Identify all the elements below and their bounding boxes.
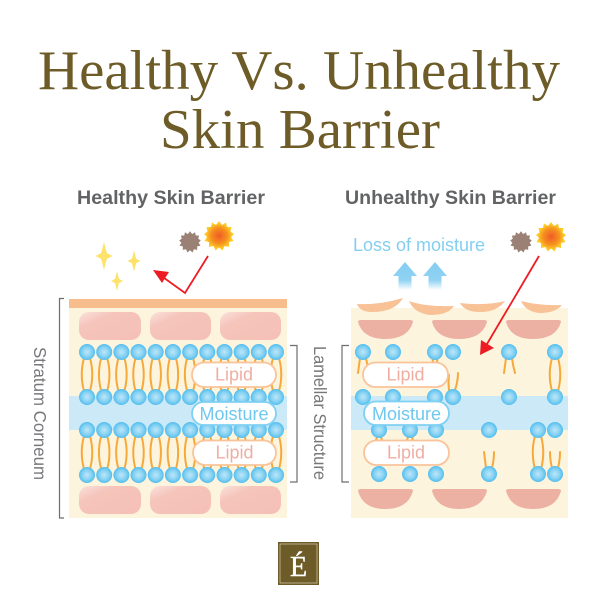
lipid heads	[79, 344, 284, 483]
label: loss of moisture: Loss of moisture	[353, 235, 485, 255]
title: Healthy Vs. Unhealthy	[38, 40, 560, 102]
heading: healthy skin barrier: Healthy Skin Barrier	[77, 187, 265, 209]
stratum corneum bracket	[60, 298, 64, 518]
damaged corneocytes bottom row	[358, 489, 561, 509]
moisture band	[351, 396, 568, 430]
corneocytes top row	[79, 312, 281, 340]
label: moisture: Moisture	[199, 404, 269, 424]
label: lipid	[193, 440, 276, 465]
label: lipid: Lipid	[387, 442, 425, 462]
arrow: deflected rays	[153, 256, 208, 293]
icon: sparkles	[96, 242, 140, 291]
label: lipid: Lipid	[215, 442, 254, 462]
label: moisture	[364, 402, 449, 425]
lipid heads	[355, 344, 563, 482]
label: lipid: Lipid	[215, 364, 253, 384]
label: stratum corneum: Stratum Corneum	[30, 347, 50, 480]
label: moisture: Moisture	[372, 404, 441, 424]
label: lipid: Lipid	[386, 364, 425, 384]
broken lipid tails	[358, 356, 560, 469]
icon: sun	[204, 221, 234, 250]
heading: unhealthy skin barrier: Unhealthy Skin Barrier	[345, 187, 556, 209]
label: lamellar structure: Lamellar Structure	[310, 346, 330, 480]
flaking top skin layer	[357, 298, 562, 315]
arrows: moisture escaping	[393, 262, 447, 290]
top skin layer	[69, 299, 287, 308]
label: lipid	[364, 440, 449, 465]
lipid tails	[82, 358, 281, 469]
title: Skin Barrier	[160, 99, 440, 161]
icon: pollution particle	[179, 231, 201, 252]
logo	[278, 542, 319, 585]
logo: É	[290, 552, 307, 583]
panel: healthy skin barrier	[30, 187, 297, 518]
lamellar bracket	[342, 346, 349, 482]
arrow: rays penetrating	[480, 256, 539, 355]
skin background	[69, 308, 287, 518]
title	[38, 40, 560, 161]
corneocytes bottom row	[79, 486, 281, 514]
skin background	[351, 308, 568, 518]
damaged corneocytes top row	[358, 320, 561, 339]
label: lipid	[192, 362, 276, 387]
icon: pollution particle	[510, 231, 532, 252]
label: lipid	[363, 362, 448, 387]
lamellar bracket	[290, 346, 297, 482]
moisture band	[69, 396, 287, 430]
panel: unhealthy skin barrier	[310, 187, 568, 518]
icon: sun	[536, 222, 566, 252]
